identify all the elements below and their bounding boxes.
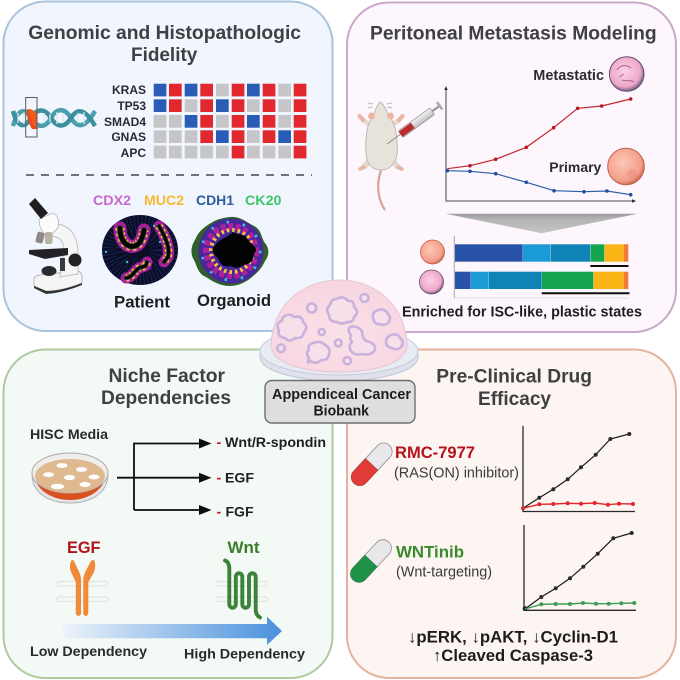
panel: genomic and histopathologic fidelity [4, 2, 332, 331]
legend: marker stains: CDX2 [93, 193, 131, 209]
chart: stacked cell-state bars [454, 236, 630, 298]
label box: appendiceal cancer biobank: Biobank [314, 404, 370, 420]
list: withdrawn factors: Wnt/R-spondin [225, 435, 326, 451]
heading: drug efficacy: Pre-Clinical Drug [436, 367, 592, 388]
panel: peritoneal metastasis modeling [347, 2, 676, 332]
heading: niche factor: Niche Factor [108, 366, 225, 387]
chart: tumour growth lines [444, 86, 636, 203]
chart: WNTinib growth [523, 525, 636, 611]
gene labels: KRAS [112, 83, 146, 97]
text: biomarker changes [408, 627, 618, 665]
gene labels: TP53 [117, 99, 146, 113]
label: high dependency: High Dependency [184, 646, 305, 662]
icon: DNA helix with highlighted region [13, 98, 95, 137]
heading: genomic fidelity: Fidelity [131, 45, 198, 66]
bar: metastatic [455, 272, 628, 289]
icon: RMC-7977 capsule [348, 439, 396, 489]
label: RMC-7977: RMC-7977 [395, 444, 475, 462]
label: organoid: Organoid [197, 291, 271, 310]
label: EGF: EGF [67, 539, 101, 557]
legend: marker stains: CK20 [245, 193, 282, 209]
icon: primary organoid small [420, 240, 444, 264]
heading: genomic fidelity [28, 23, 301, 66]
legend: marker stains: MUC2 [144, 193, 184, 209]
icon: microscope [29, 198, 82, 294]
icon: petri dish [260, 327, 418, 381]
list: withdrawn factors: - [216, 435, 222, 451]
list: withdrawn factors: FGF [226, 504, 254, 520]
icon: EGF receptor in membrane [56, 560, 108, 616]
label: HISC media: HISC Media [30, 427, 108, 443]
heading: niche factor: Dependencies [101, 388, 231, 409]
arrow: dependency gradient [63, 617, 282, 645]
icon: metastatic organoid [609, 57, 644, 91]
heatmap cells [154, 84, 306, 158]
label: RAS(ON) inhibitor: (RAS(ON) inhibitor) [394, 466, 519, 482]
panel: pre-clinical drug efficacy [347, 350, 676, 678]
list: withdrawn factors: - [216, 470, 222, 486]
label: metastatic: Metastatic [533, 68, 604, 84]
icon: tissue dome [271, 280, 407, 372]
legend: marker stains: CDH1 [196, 193, 234, 209]
label: primary: Primary [549, 160, 601, 176]
chart: RMC-7977 growth [521, 426, 635, 512]
image: organoid immunofluorescence [191, 217, 268, 286]
image: patient tissue immunofluorescence [102, 215, 178, 285]
label: patient: Patient [114, 292, 170, 312]
label box: appendiceal cancer biobank [265, 380, 415, 423]
icon: metastatic organoid small [420, 270, 444, 294]
gene labels: SMAD4 [104, 115, 146, 129]
label: Wnt-targeting: (Wnt-targeting) [396, 565, 492, 581]
gene labels: APC [121, 146, 146, 160]
arrows: withdrawal tree [117, 438, 212, 515]
caption: enriched states: Enriched for ISC-like, plastic states [402, 305, 642, 321]
bar: primary [455, 244, 628, 262]
arrow: downward triangle [446, 214, 638, 233]
chart: mutation heatmap [104, 83, 306, 160]
icon: WNTinib capsule [347, 536, 395, 586]
icon: Wnt receptor in membrane [216, 560, 268, 618]
label: WNTinib: WNTinib [396, 543, 464, 562]
list: withdrawn factors: EGF [225, 470, 254, 486]
heading: peritoneal metastasis: Peritoneal Metastasis Modeling [370, 23, 657, 44]
gene labels [104, 83, 146, 160]
heading: genomic fidelity: Genomic and Histopathologic [28, 23, 301, 44]
list: withdrawn factors: - [216, 504, 222, 520]
label box: appendiceal cancer biobank: Appendiceal Cancer [272, 387, 411, 403]
gene labels: GNAS [111, 130, 146, 144]
text: biomarker changes: ↑Cleaved Caspase-3 [433, 646, 593, 665]
heading: drug efficacy: Efficacy [478, 389, 551, 410]
icon: mouse with syringe [360, 101, 443, 210]
legend: marker stains [93, 193, 282, 209]
center: biobank dome and dish [260, 280, 418, 423]
heading: drug efficacy [436, 367, 592, 410]
icon: culture dish [32, 453, 108, 503]
panel: niche factor dependencies [4, 350, 332, 678]
heading: niche factor [101, 366, 231, 409]
label: Wnt: Wnt [228, 538, 260, 557]
organoids in dome [277, 294, 403, 364]
label: low dependency: Low Dependency [30, 644, 147, 660]
list: withdrawn factors [216, 435, 326, 520]
icon: primary organoid [608, 148, 644, 185]
text: biomarker changes: ↓pERK, ↓pAKT, ↓Cyclin-D1 [408, 627, 618, 646]
